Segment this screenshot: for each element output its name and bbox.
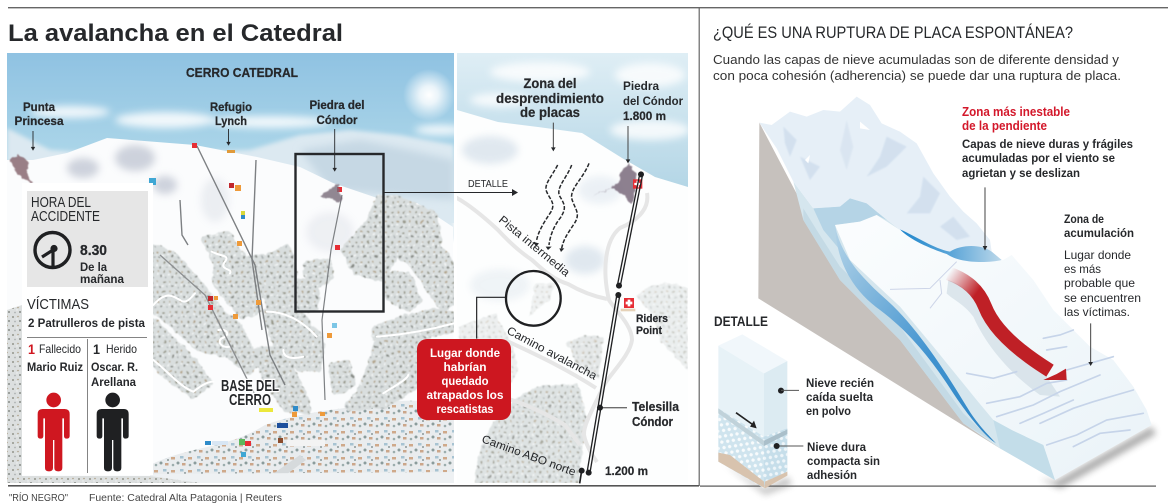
ski trails (455, 193, 647, 462)
map labels: Piedra del (310, 98, 364, 112)
map labels: CERRO CATEDRAL (186, 65, 298, 80)
map labels (14, 65, 364, 409)
panel: accident info (22, 183, 153, 475)
panel: accident info: Herido (106, 342, 137, 356)
panel: accident info: 1 (93, 341, 100, 357)
map labels: Cóndor (316, 113, 358, 127)
panel: accident info: 8.30 (80, 242, 107, 259)
text: detail labels: en polvo (806, 404, 851, 418)
text: detail labels: adhesión (807, 468, 857, 482)
detail map labels: Cóndor (632, 415, 673, 429)
text: detail labels: Nieve recién (806, 376, 874, 390)
icon: black person (97, 393, 129, 471)
callout: rescue (417, 339, 511, 420)
detail map labels: Zona del (524, 75, 576, 91)
rock side (758, 123, 1000, 448)
arrows: labels (553, 123, 628, 160)
shadow (1040, 427, 1156, 488)
text: detail labels: compacta sin (807, 454, 880, 468)
title: La avalancha en el Catedral (8, 20, 343, 47)
icon: cross Piedra del Cóndor (633, 179, 642, 189)
detail map labels: Riders (636, 313, 668, 325)
rock: Piedra del Cóndor detail (592, 164, 636, 204)
lift lines (160, 146, 342, 400)
detail rectangle on map (296, 154, 384, 312)
detail map labels: Telesilla (632, 400, 680, 414)
clouds (470, 62, 690, 140)
white trails (153, 252, 454, 393)
footer credits: "RÍO NEGRO" (9, 491, 68, 504)
pointer lines (985, 187, 1091, 363)
detail map labels: desprendimiento (496, 90, 604, 106)
text: detail labels: DETALLE (714, 314, 768, 329)
right intro text: con poca cohesión (adherencia) se puede dar una ruptura de placa. (713, 68, 1121, 83)
detail map labels: del Cóndor (623, 94, 683, 108)
detail map labels (480, 75, 683, 479)
detail map labels: de placas (520, 104, 580, 120)
text: accumulation zone: es más (1064, 262, 1101, 276)
arrows: slab release zone (537, 163, 589, 248)
map labels: Princesa (14, 114, 64, 128)
callout: rescue: quedado (442, 376, 488, 388)
snow slope (7, 138, 453, 241)
text: accumulation zone: Lugar donde (1064, 248, 1131, 262)
icon: red person (38, 393, 70, 471)
map symbols (149, 143, 342, 457)
callout: rescue: atrapados los (426, 390, 504, 402)
text: accumulation zone: acumulación (1064, 226, 1134, 240)
detail map labels: 1.800 m (623, 109, 666, 123)
pointers (778, 388, 784, 394)
sun (405, 70, 453, 119)
panel: accident info: 2 Patrulleros de pista (28, 316, 145, 330)
detail map labels: Camino ABO norte (480, 434, 577, 479)
panel: detail map (455, 53, 690, 483)
footer credits (9, 491, 282, 504)
right heading: ¿QUÉ ES UNA RUPTURA DE PLACA ESPONTÁNEA? (713, 23, 1073, 42)
distant mountains (7, 128, 454, 240)
red arrow (948, 273, 1067, 380)
panel: general map of Cerro Catedral (7, 53, 465, 483)
text: accumulation zone: probable que (1064, 276, 1135, 290)
text: detail labels (714, 314, 880, 482)
map labels: Lynch (215, 114, 247, 128)
illustration: slab avalanche slope (718, 97, 1156, 495)
detail map drawing (477, 123, 644, 483)
text: accumulation zone: las víctimas. (1064, 305, 1130, 319)
detail map labels: Piedra (623, 79, 659, 93)
detail map labels: 1.200 m (605, 464, 648, 478)
debris streaks (967, 330, 1143, 447)
text: accumulation zone (1064, 212, 1141, 319)
callout: rescue: Lugar donde (430, 348, 500, 360)
text: unstable zone: agrietan y se deslizan (962, 166, 1080, 180)
panel: accident info: ACCIDENTE (31, 208, 100, 225)
panel: accident info: HORA DEL (31, 194, 91, 211)
arrow shadow (947, 280, 1060, 397)
circle: rescue location (477, 271, 561, 339)
rock: Piedra del Cóndor (320, 185, 342, 202)
slab top surface (835, 215, 1152, 480)
footer credits: Fuente: Catedral Alta Patagonia | Reuters (89, 492, 282, 504)
telesilla line (579, 171, 644, 483)
detail map labels: Point (636, 325, 662, 337)
panel: accident info: mañana (80, 272, 124, 286)
callout: rescue: rescatistas (436, 404, 494, 416)
panel: accident info: Arellana (91, 375, 136, 389)
victims: VÍCTIMAS (27, 296, 89, 313)
right intro text (713, 52, 1121, 83)
detail block (718, 334, 803, 495)
text: detail labels: Nieve dura (807, 440, 866, 454)
cracks (890, 262, 957, 308)
forest areas (153, 200, 454, 410)
crevasse (900, 229, 1002, 262)
panel: accident info: Mario Ruiz (27, 360, 83, 374)
panel: accident info: Fallecido (39, 342, 81, 356)
text: detail labels: caída suelta (806, 390, 873, 404)
detail arrow DETALLE: DETALLE (468, 179, 508, 190)
blue sliding stripe (835, 225, 996, 443)
text: unstable zone (962, 105, 1133, 180)
right intro text: Cuando las capas de nieve acumuladas son de diferente densidad y (713, 52, 1120, 67)
snow shading (462, 136, 622, 301)
callout: rescue: habrían (444, 362, 486, 374)
rock: Punta Princesa (9, 155, 33, 183)
map labels: Punta (23, 100, 55, 114)
clouds (30, 106, 465, 135)
mountain creases (783, 120, 970, 240)
panel: accident info: 1 (28, 341, 35, 357)
icon: cross Riders Point (621, 298, 635, 311)
snow bed side (793, 182, 1055, 480)
mountain snow (759, 97, 1002, 262)
panel: accident info: De la (80, 260, 107, 274)
detail arrow DETALLE (384, 179, 518, 196)
map labels: BASE DEL (221, 378, 279, 395)
text: unstable zone: Capas de nieve duras y frágiles (962, 137, 1133, 151)
map labels: CERRO (229, 392, 271, 409)
text: unstable zone: acumuladas por el viento se (962, 151, 1115, 165)
detail map labels: Pista intermedia (496, 214, 572, 280)
map labels: Refugio (210, 100, 252, 114)
text: unstable zone: de la pendiente (962, 119, 1047, 133)
text: accumulation zone: Zona de (1064, 212, 1104, 226)
text: accumulation zone: se encuentren (1064, 291, 1141, 305)
side forest left of panel (7, 305, 22, 480)
forest patches (458, 283, 688, 483)
slab front face (993, 420, 1055, 480)
time box (27, 191, 148, 287)
town at the base (153, 400, 454, 474)
blue cavity edge (813, 198, 887, 250)
text: unstable zone: Zona más inestable (962, 105, 1070, 119)
detail map labels: Camino avalancha (505, 325, 599, 383)
panel: accident info: Oscar. R. (91, 360, 138, 374)
icon: clock (35, 232, 70, 268)
